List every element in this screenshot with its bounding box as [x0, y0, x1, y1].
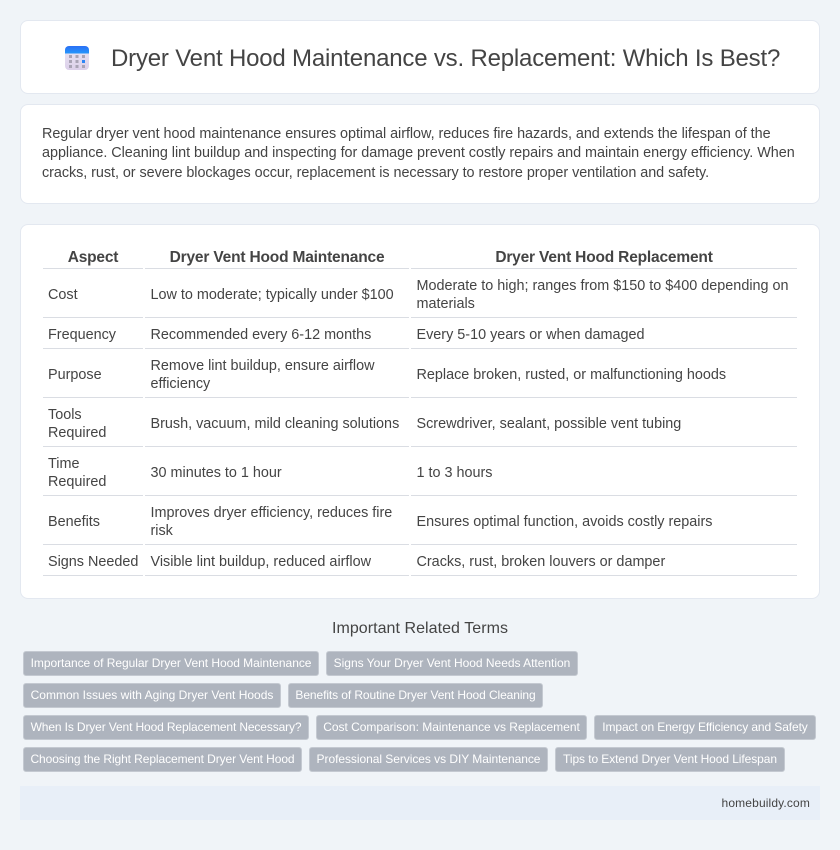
table header: Dryer Vent Hood Maintenance: [170, 249, 384, 266]
tag: [326, 651, 578, 676]
tag: Benefits of Routine Dryer Vent Hood Cleaning: [295, 688, 536, 702]
row: frequency: Every 5-10 years or when damaged: [416, 327, 644, 343]
tag: [288, 683, 543, 708]
tag: Choosing the Right Replacement Dryer Vent Hood: [30, 752, 294, 766]
footer source: homebuildy.com: [722, 796, 810, 810]
tag: Tips to Extend Dryer Vent Hood Lifespan: [563, 752, 777, 766]
icon: calendar: [65, 46, 89, 70]
row: purpose: Remove lint buildup, ensure airflow: [150, 358, 374, 374]
tag: [23, 651, 319, 676]
row: tools required: Tools: [48, 407, 82, 423]
row: signs needed: Signs Needed: [48, 554, 138, 570]
intro text: Regular dryer vent hood maintenance ensures optimal airflow, reduces fire hazards, and extends the lifespan of the: [42, 126, 771, 142]
related terms heading: Important Related Terms: [332, 620, 508, 637]
tag: Impact on Energy Efficiency and Safety: [602, 720, 808, 734]
tag: [23, 683, 281, 708]
tag: Cost Comparison: Maintenance vs Replacement: [323, 720, 580, 734]
row: purpose: Replace broken, rusted, or malfunctioning hoods: [416, 367, 726, 383]
table header: [68, 249, 713, 266]
row: benefits: Improves dryer efficiency, reduces fire: [150, 505, 392, 521]
title: Dryer Vent Hood Maintenance vs. Replacement: Which Is Best?: [111, 45, 780, 72]
tag: [23, 715, 309, 740]
row: purpose: [48, 358, 726, 392]
row: purpose: efficiency: [150, 376, 210, 392]
row: frequency: Frequency: [48, 327, 116, 343]
tag: Professional Services vs DIY Maintenance: [317, 752, 540, 766]
row: signs needed: Cracks, rust, broken louvers or damper: [416, 554, 665, 570]
row: signs needed: Visible lint buildup, reduced airflow: [150, 554, 371, 570]
tag: When Is Dryer Vent Hood Replacement Necessary?: [31, 720, 301, 734]
row: frequency: Recommended every 6-12 months: [150, 327, 371, 343]
tag: [23, 747, 302, 772]
tag: Importance of Regular Dryer Vent Hood Maintenance: [31, 656, 311, 670]
related terms tags: [23, 651, 816, 772]
tag: [555, 747, 785, 772]
tag: Signs Your Dryer Vent Hood Needs Attention: [334, 656, 570, 670]
row: benefits: Benefits: [48, 514, 100, 530]
row: signs needed: [48, 554, 666, 570]
row: frequency: [48, 327, 644, 343]
row: cost: materials: [416, 296, 475, 312]
table header: Aspect: [68, 249, 118, 266]
table header: Dryer Vent Hood Replacement: [495, 249, 713, 266]
row: cost: Cost: [48, 287, 78, 303]
row: time required: 30 minutes to 1 hour: [150, 465, 282, 481]
row: time required: Required: [48, 474, 106, 490]
intro text: cracks, rust, or severe blockages occur, replacement is necessary to restore proper ventilation and safety.: [42, 164, 709, 180]
comparison table panel: [20, 224, 820, 599]
header card: [20, 20, 820, 94]
tag: [594, 715, 816, 740]
row: cost: Moderate to high; ranges from $150 to $400 depending on: [416, 278, 789, 294]
row: cost: Low to moderate; typically under $100: [150, 287, 394, 303]
tag: [309, 747, 548, 772]
intro text: [42, 126, 795, 180]
intro panel: [20, 104, 820, 204]
row: time required: 1 to 3 hours: [416, 465, 493, 481]
tag: Common Issues with Aging Dryer Vent Hoods: [31, 688, 273, 702]
tag: [316, 715, 587, 740]
intro text: appliance. Cleaning lint buildup and inspecting for damage prevent costly repairs and maintain energy efficiency. When: [42, 145, 795, 161]
row: tools required: Required: [48, 425, 106, 441]
row: benefits: risk: [150, 523, 173, 539]
row: tools required: [48, 407, 681, 441]
row: time required: [48, 456, 493, 490]
footer: [20, 786, 820, 820]
row: time required: Time: [48, 456, 79, 472]
row: tools required: Screwdriver, sealant, possible vent tubing: [416, 416, 681, 432]
row: cost: [48, 278, 789, 312]
row: purpose: Purpose: [48, 367, 102, 383]
row: benefits: [48, 505, 712, 539]
row: tools required: Brush, vacuum, mild cleaning solutions: [150, 416, 399, 432]
row: benefits: Ensures optimal function, avoids costly repairs: [416, 514, 712, 530]
